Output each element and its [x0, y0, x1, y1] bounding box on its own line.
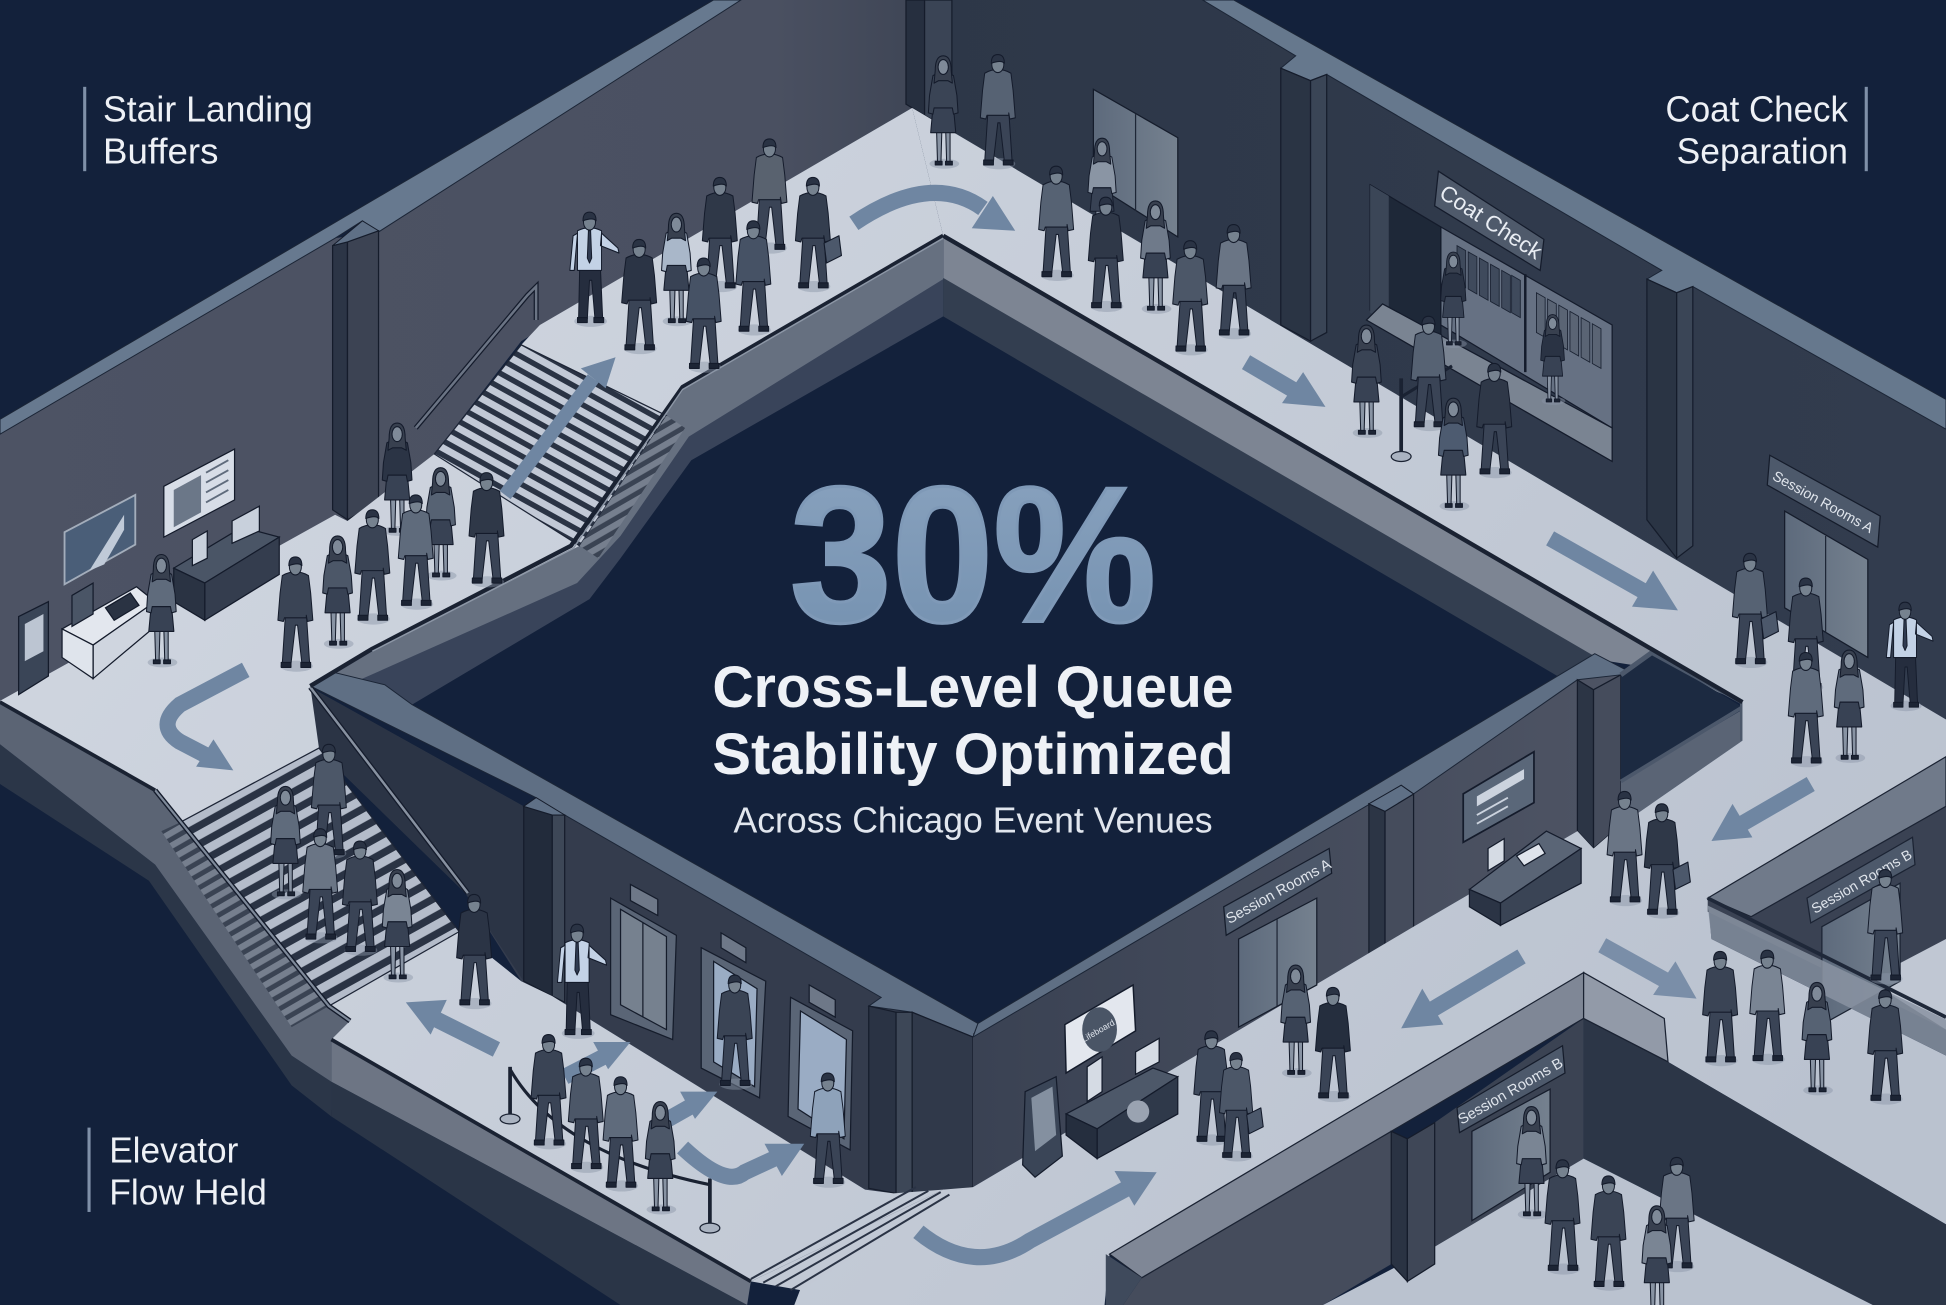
panel: inner ledge north-west — [329, 236, 943, 705]
panel: right session room B — [1708, 757, 1946, 1056]
panel: session rooms A door centre: Session Rooms A — [1224, 857, 1334, 928]
subheading: Across Chicago Event Venues — [733, 799, 1213, 840]
panel: reception table with screen lower: Lifeboard — [1080, 1017, 1116, 1044]
people: session A pairs — [1194, 965, 1350, 1162]
arrow: top corridor curve — [854, 193, 1015, 231]
panel: session rooms A door right: Session Rooms A — [1770, 468, 1876, 537]
arrow: elevator entry one — [565, 1042, 630, 1077]
label: Elevator Flow Held: Flow Held — [109, 1172, 267, 1213]
people: west queue — [146, 423, 504, 672]
panel: central wall south-east — [973, 654, 1626, 1187]
label: Coat Check Separation: Coat Check — [1666, 89, 1849, 130]
panel: coat check booth — [1366, 171, 1612, 461]
panel: reception table with screen lower — [1023, 985, 1178, 1177]
people: top pair — [928, 55, 1015, 169]
panel: lower staircase — [155, 687, 468, 1027]
panel: lower session room B: Session Rooms B — [1456, 1055, 1566, 1128]
arrow: right diagonal down-right — [1602, 945, 1697, 999]
arrow: right diagonal down-left — [1711, 784, 1811, 841]
arrow: lower curve — [918, 1171, 1157, 1257]
people: north-east corridor group — [1039, 138, 1251, 355]
heading: Cross-Level Queue: Cross-Level Queue — [712, 655, 1234, 720]
panel: elevators — [611, 884, 853, 1150]
people: coat check queue — [1352, 316, 1512, 511]
panel: exhibit table with screen right — [1463, 752, 1581, 925]
panel: west landing floor — [0, 454, 580, 822]
arrow: elevator entry three — [683, 1144, 804, 1177]
coats rack — [1457, 246, 1601, 368]
panel: session rooms A door centre — [1224, 848, 1334, 1027]
label: Stair Landing Buffers: Buffers — [103, 131, 218, 172]
people: lower room group — [1517, 1107, 1694, 1305]
people: elevator queue — [531, 924, 845, 1214]
icon: north service doors — [1093, 89, 1178, 237]
panel: main corridor floor — [794, 108, 1946, 1305]
label: Stair Landing Buffers — [83, 87, 313, 172]
panel: upper staircase — [416, 287, 685, 558]
arrow: elevator corridor to stairs — [406, 1000, 496, 1049]
panel: upper right outer wall — [906, 0, 1946, 726]
arrow: elevator entry two — [666, 1092, 717, 1120]
people: pair by table — [1607, 791, 1690, 919]
panel: upper left landing floor — [521, 108, 943, 422]
panel: west outer ledge — [0, 702, 751, 1305]
panel: stanchions — [500, 366, 1452, 1233]
panel: light atrium glass — [1621, 652, 1742, 825]
label: Elevator Flow Held — [87, 1128, 267, 1213]
panel: west wall screens and kiosk — [19, 449, 279, 695]
arrow: west landing curve — [168, 670, 246, 770]
people: upper landing group — [570, 139, 841, 373]
stat: 30%: 30% — [790, 448, 1156, 663]
panel: lower session room B — [1106, 973, 1946, 1305]
heading: Stability Optimized: Stability Optimized — [712, 722, 1234, 787]
label: Elevator Flow Held: Elevator — [109, 1129, 238, 1170]
arrow: upward on stairs — [505, 357, 616, 495]
label: Coat Check Separation: Separation — [1677, 131, 1848, 172]
people: lower stairs — [271, 744, 492, 1009]
panel: ledge rails — [0, 236, 1742, 1281]
panel: session rooms A door right — [1767, 455, 1880, 657]
arrow: corridor two — [1550, 538, 1678, 610]
panel: coat check booth: Coat Check — [1435, 180, 1547, 265]
label: Coat Check Separation — [1666, 87, 1868, 172]
panel: upper left outer wall — [0, 0, 912, 707]
panel: central wall south-west — [310, 671, 978, 1196]
panel: elevator corridor floor — [329, 932, 943, 1281]
people: right queue at session B — [1703, 870, 1903, 1105]
panel: lower entry steps — [751, 1187, 956, 1290]
panel: inner ledge north-east — [943, 236, 1742, 702]
panel: right session room B: Session Rooms B — [1809, 847, 1915, 917]
label: Stair Landing Buffers: Stair Landing — [103, 89, 313, 130]
arrow: corridor one — [1246, 362, 1325, 407]
arrow: session corridor — [1401, 956, 1522, 1028]
people: right upper group — [1732, 553, 1933, 767]
